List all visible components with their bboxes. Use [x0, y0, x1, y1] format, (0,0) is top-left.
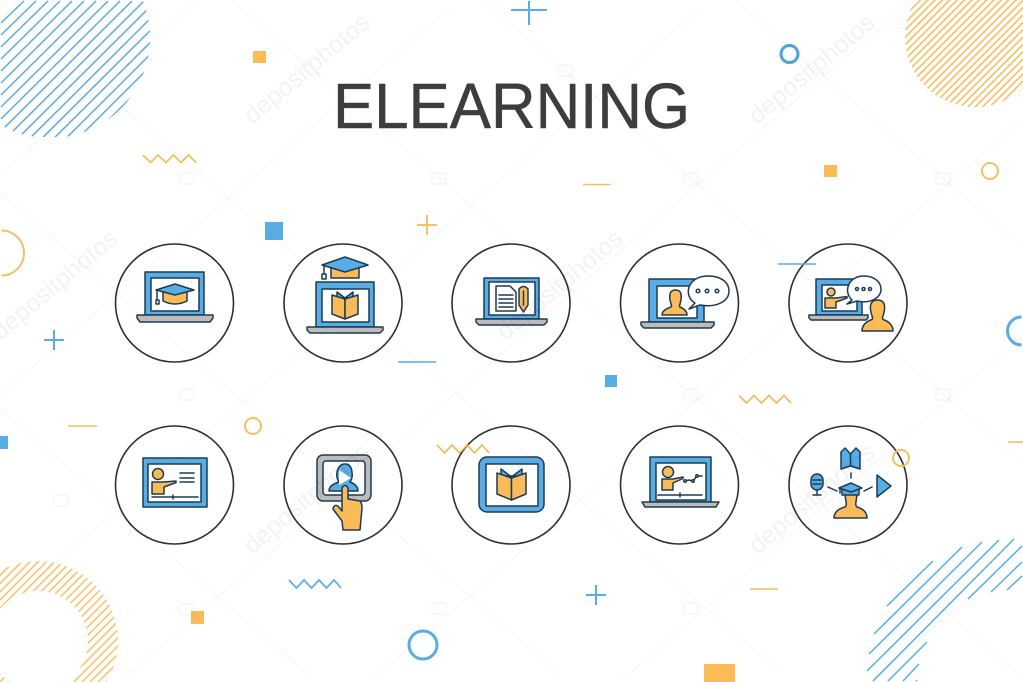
icon: laptop with person and speech bubble [620, 244, 738, 362]
hatched circle: top left blue [0, 0, 150, 137]
icon: laptop presenter with chart [620, 426, 738, 544]
watermark text: depositphotos [743, 8, 880, 130]
icon: presenter on whiteboard [116, 426, 234, 544]
hatched arc: bottom right blue [867, 539, 1022, 681]
icon: presenter laptop with listener [789, 244, 907, 362]
decorative plus signs [44, 1, 606, 605]
watermark text: depositphotos [743, 438, 880, 560]
title: ELEARNING [333, 70, 690, 142]
icon: touch tablet with video [284, 426, 402, 544]
accent zigzag over book icon [437, 445, 489, 453]
icon: laptop with book and cap [284, 244, 402, 362]
watermark text: depositphotos [491, 224, 628, 346]
icon: laptop with graduation cap [116, 244, 234, 362]
hatched circle: top right orange [905, 0, 1023, 107]
accent ring over last icon [893, 450, 909, 466]
icon: laptop with document and pencil [452, 244, 570, 362]
watermark text: depositphotos [238, 438, 375, 560]
icon: student with media [789, 426, 907, 544]
decorative dashes [68, 184, 1023, 589]
decorative squares [0, 51, 837, 682]
icon: tablet with book [452, 426, 570, 544]
accent dash over presenter icon [778, 263, 816, 265]
decorative zigzags [143, 155, 791, 588]
watermark camera icons [54, 65, 950, 615]
hatched ring: bottom left orange [0, 561, 118, 682]
watermark text [0, 8, 880, 560]
watermark text: depositphotos [238, 8, 375, 130]
